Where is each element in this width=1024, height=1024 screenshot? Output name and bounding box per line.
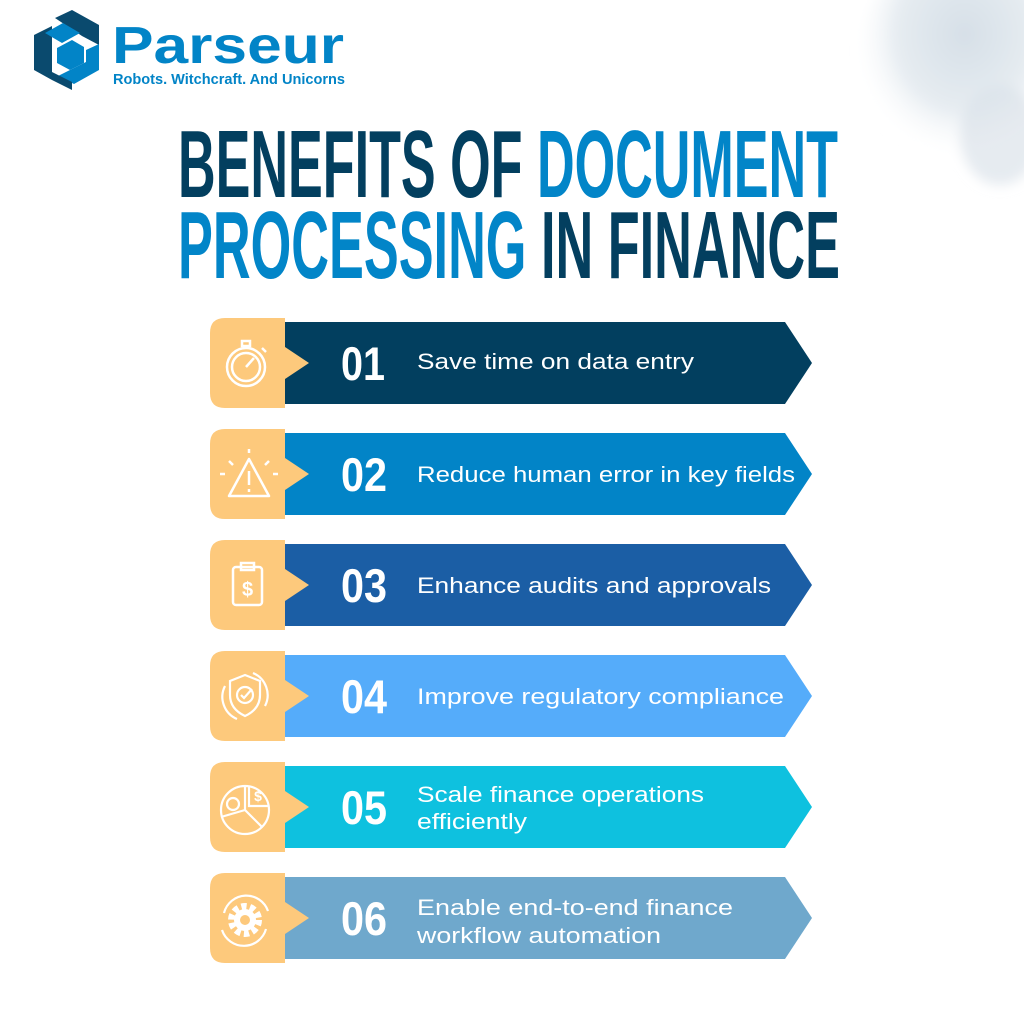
row 02: 02: [341, 448, 387, 501]
row 05: efficiently: [417, 809, 527, 834]
row 01: [210, 318, 812, 408]
icon: stopwatch: [227, 341, 266, 386]
row 03: [210, 540, 812, 630]
row 03: Enhance audits and approvals: [417, 573, 771, 598]
row 05: [210, 762, 812, 852]
row 02: Reduce human error in key fields: [417, 462, 795, 487]
row 05: 05: [341, 781, 387, 834]
logo wordmark: Parseur: [112, 17, 344, 75]
icon: clipboard dollar: $: [242, 579, 253, 601]
row 01: 01: [341, 337, 385, 390]
logo tagline: Robots. Witchcraft. And Unicorns: [113, 72, 345, 88]
row 01: Save time on data entry: [417, 349, 694, 374]
row 03: 03: [341, 559, 387, 612]
row 05: Scale finance operations: [417, 782, 704, 807]
row 06: [210, 873, 812, 963]
row 04: [210, 651, 812, 741]
icon: shield check: [222, 673, 268, 719]
icon: pie chart: [221, 786, 269, 834]
row 04: 04: [341, 670, 387, 723]
icon: clipboard dollar: [233, 563, 262, 605]
logo icon: [34, 10, 99, 90]
title: [178, 111, 840, 299]
icon: warning: [220, 449, 278, 496]
row 04: Improve regulatory compliance: [417, 684, 784, 709]
logo: [34, 10, 345, 90]
watercolor decoration: [860, 0, 1024, 185]
row 06: 06: [341, 892, 387, 945]
icon: gear cycle: [222, 896, 268, 946]
row 06: Enable end-to-end finance: [417, 895, 733, 920]
row 02: [210, 429, 812, 519]
row 06: workflow automation: [416, 923, 661, 948]
icon: pie chart: $: [254, 788, 262, 804]
